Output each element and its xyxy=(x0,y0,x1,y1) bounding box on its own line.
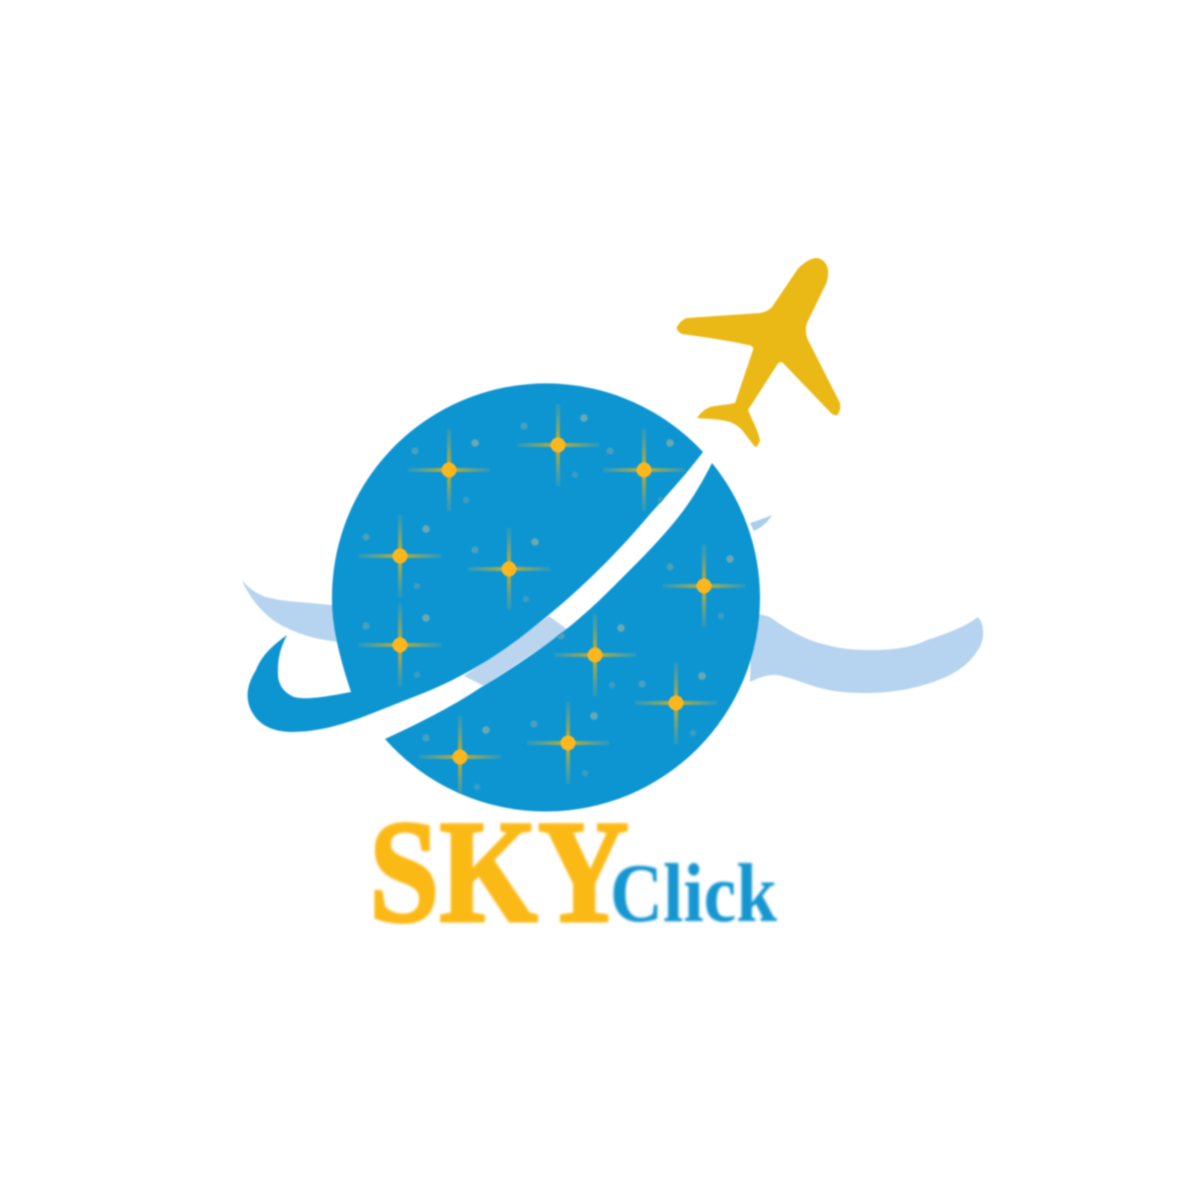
text: Click: Click xyxy=(610,847,777,940)
globe: upper half with orbit ring xyxy=(248,383,703,732)
icon: airplane xyxy=(677,258,840,447)
swoosh: pale blue right cloud xyxy=(750,612,983,693)
swoosh: pale blue left cloud xyxy=(242,580,340,642)
text: SKY: SKY xyxy=(369,790,629,953)
swoosh: pale band across globe xyxy=(464,616,568,686)
globe: lower half xyxy=(385,463,760,812)
globe xyxy=(248,383,760,812)
wordmark xyxy=(369,790,777,953)
small orbit tip right xyxy=(750,515,772,531)
stars xyxy=(359,404,745,798)
logo: SKY Click xyxy=(242,257,984,926)
